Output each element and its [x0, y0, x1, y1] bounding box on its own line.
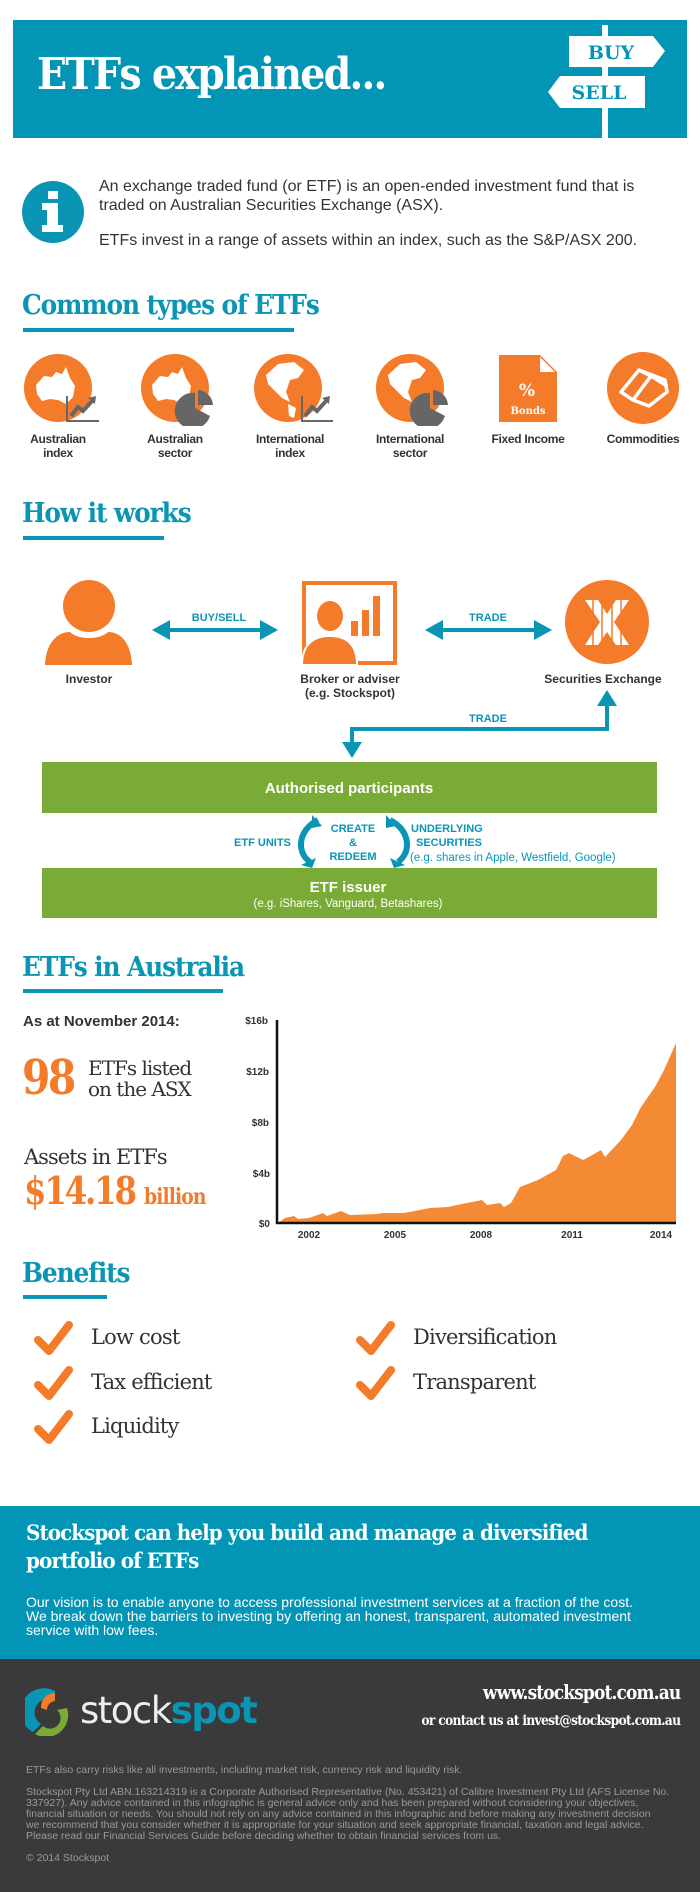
- intro text: [99, 178, 637, 249]
- intro text: traded on Australian Securities Exchange (ASX).: [99, 197, 443, 214]
- icon: buy/sell signpost: BUY: [588, 42, 635, 64]
- box: etf issuer: ETF issuer: [310, 879, 387, 896]
- cta heading: [26, 1520, 588, 1573]
- arrows: create and redeem: (e.g. shares in Apple, Westfield, Google): [410, 852, 616, 864]
- logo: [25, 1688, 257, 1736]
- panel: benefits list: [34, 1321, 557, 1444]
- label: international index: International: [256, 432, 324, 446]
- stat: 98 ETFs: on the ASX: [88, 1077, 191, 1101]
- benefit: low cost: [34, 1321, 180, 1355]
- panel: stockspot call to action: [0, 1506, 700, 1659]
- label: securities exchange: Securities Exchange: [544, 672, 662, 686]
- cta body: We break down the barriers to investing by offering an honest, transparent, automated investment: [26, 1608, 631, 1624]
- disclaimer: ETFs also carry risks like all investments, including market risk, currency risk and liquidity risk.: [26, 1764, 462, 1776]
- icon: australian sector: [141, 354, 213, 429]
- heading: ETFs in Australia: ETFs in Australia: [22, 952, 244, 983]
- label: international index: [256, 432, 324, 460]
- chart: ETF assets over time: 2002: [298, 1230, 321, 1241]
- icon: investor: [45, 580, 132, 665]
- website: www.stockspot.com.au: [482, 1680, 680, 1704]
- chart: ETF assets over time: 2005: [384, 1230, 407, 1241]
- benefit: liquidity: [34, 1410, 180, 1444]
- arrow: trade to authorised participants: TRADE: [469, 713, 507, 725]
- stat: 98 ETFs: [22, 1050, 192, 1106]
- heading: common types: Common types of ETFs: [22, 290, 319, 321]
- benefit: diversification: [356, 1321, 557, 1355]
- icon: buy/sell signpost: SELL: [572, 82, 626, 104]
- disclaimer: we recommend that you consider whether it is appropriate for your situation and seek appropriate financial, taxation and legal advice.: [26, 1819, 644, 1831]
- disclaimer: 337927). Any advice contained in this infographic is general advice only and has been prepared without considering your objectives,: [26, 1797, 638, 1809]
- icon: international sector: [376, 354, 448, 429]
- cta body: service with low fees.: [26, 1622, 158, 1638]
- icon: buy/sell signpost: [548, 25, 665, 138]
- label: australian sector: sector: [158, 446, 192, 460]
- arrow: buy/sell: [152, 612, 278, 640]
- chart: ETF assets over time: $8b: [252, 1118, 269, 1129]
- icon: commodities: [607, 352, 679, 424]
- panel: footer: [0, 1659, 700, 1892]
- disclaimer: © 2014 Stockspot: [26, 1852, 109, 1864]
- chart: ETF assets over time: 2011: [561, 1230, 583, 1241]
- title: ETFs explained...: [37, 49, 386, 100]
- benefit: low cost: Low cost: [91, 1325, 179, 1349]
- label: international sector: sector: [393, 446, 427, 460]
- chart: ETF assets over time: [245, 1016, 676, 1241]
- icon: international index: [254, 354, 333, 422]
- intro text: ETFs invest in a range of assets within an index, such as the S&P/ASX 200.: [99, 232, 637, 249]
- icon: fixed income bonds: [499, 355, 557, 422]
- label: international index: index: [275, 446, 305, 460]
- chart: ETF assets over time: $4b: [253, 1169, 270, 1180]
- panel: how it works flow diagram: [42, 580, 662, 918]
- icon: info: [22, 181, 84, 243]
- box: authorised participants: [42, 762, 657, 813]
- icon: australian index: [24, 354, 99, 422]
- contact: or contact us at invest@stockspot.com.au: [421, 1713, 680, 1729]
- arrows: create and redeem: [234, 815, 616, 868]
- arrow: buy/sell: BUY/SELL: [192, 612, 246, 624]
- arrows: create and redeem: CREATE: [331, 823, 375, 835]
- icon: fixed income bonds: %: [519, 381, 535, 401]
- arrows: create and redeem: REDEEM: [329, 851, 377, 863]
- icons: ETF types: [24, 352, 679, 426]
- arrow: trade top: TRADE: [469, 612, 507, 624]
- chart: ETF assets over time: 2008: [470, 1230, 493, 1241]
- label: broker: (e.g. Stockspot): [305, 686, 395, 700]
- arrows: create and redeem: &: [349, 837, 357, 849]
- label: australian sector: [147, 432, 203, 460]
- heading: how it works: How it works: [22, 498, 191, 529]
- box: etf issuer: [42, 868, 657, 918]
- box: etf issuer: (e.g. iShares, Vanguard, Betashares): [253, 898, 443, 910]
- stat: assets: [24, 1145, 206, 1213]
- stat: assets: Assets in ETFs: [24, 1145, 167, 1169]
- arrows: create and redeem: UNDERLYING: [411, 823, 483, 835]
- arrow: trade top: [425, 612, 552, 640]
- cta body: [26, 1594, 633, 1638]
- cta heading: portfolio of ETFs: [26, 1548, 198, 1573]
- icon: broker: [302, 583, 395, 665]
- box: authorised participants: Authorised participants: [265, 780, 433, 797]
- label: australian index: [30, 432, 86, 460]
- stat: 98 ETFs: 98: [22, 1050, 74, 1106]
- benefit: transparent: Transparent: [413, 1370, 535, 1394]
- benefit: liquidity: Liquidity: [91, 1414, 179, 1438]
- cta body: Our vision is to enable anyone to access professional investment services at a fraction of the cost.: [26, 1594, 633, 1610]
- benefit: diversification: Diversification: [413, 1325, 556, 1349]
- benefit: tax efficient: Tax efficient: [91, 1370, 212, 1394]
- benefit: tax efficient: [34, 1366, 212, 1400]
- label: commodities: Commodities: [607, 432, 679, 446]
- intro text: An exchange traded fund (or ETF) is an open-ended investment fund that is: [99, 178, 634, 195]
- label: australian index: index: [43, 446, 73, 460]
- disclaimer: financial situation or needs. You should not rely on any advice contained in this infographic and before making any investment decision: [26, 1808, 651, 1820]
- cta heading: Stockspot can help you build and manage a diversified: [26, 1520, 587, 1545]
- chart: ETF assets over time: $12b: [246, 1067, 269, 1078]
- disclaimer: Stockspot Pty Ltd ABN.163214319 is a Corporate Authorised Representative (No. 453421) of Calibre Investment Pty Ltd (AFS License No.: [26, 1786, 669, 1798]
- benefit: transparent: [356, 1366, 536, 1400]
- label: international sector: [376, 432, 444, 460]
- arrow: trade to authorised participants: [342, 690, 617, 758]
- label: australian sector: Australian: [147, 432, 203, 446]
- logo: stockspot: [80, 1689, 256, 1732]
- chart: ETF assets over time: 2014: [650, 1230, 673, 1241]
- chart: ETF assets over time: $0: [259, 1219, 270, 1230]
- stat: assets: $14.18 billion: [24, 1168, 206, 1213]
- stat: 98 ETFs: ETFs listed: [88, 1056, 191, 1080]
- icon: securities exchange: [565, 580, 649, 664]
- arrows: create and redeem: SECURITIES: [416, 837, 482, 849]
- disclaimer: Please read our Financial Services Guide before deciding whether to obtain financial services from us.: [26, 1830, 501, 1842]
- label: fixed income: Fixed Income: [491, 432, 565, 446]
- icon: fixed income bonds: Bonds: [510, 406, 546, 417]
- disclaimer: [26, 1764, 669, 1864]
- header banner: [13, 20, 687, 138]
- chart: ETF assets over time: $16b: [245, 1016, 268, 1027]
- panel: ETF type icons: [24, 352, 680, 460]
- label: investor: Investor: [66, 672, 113, 686]
- arrows: create and redeem: ETF UNITS: [234, 837, 291, 849]
- label: australian index: Australian: [30, 432, 86, 446]
- heading: benefits: Benefits: [22, 1258, 129, 1289]
- label: international sector: International: [376, 432, 444, 446]
- label: broker: Broker or adviser: [300, 672, 400, 686]
- text: as at november: As at November 2014:: [23, 1013, 180, 1030]
